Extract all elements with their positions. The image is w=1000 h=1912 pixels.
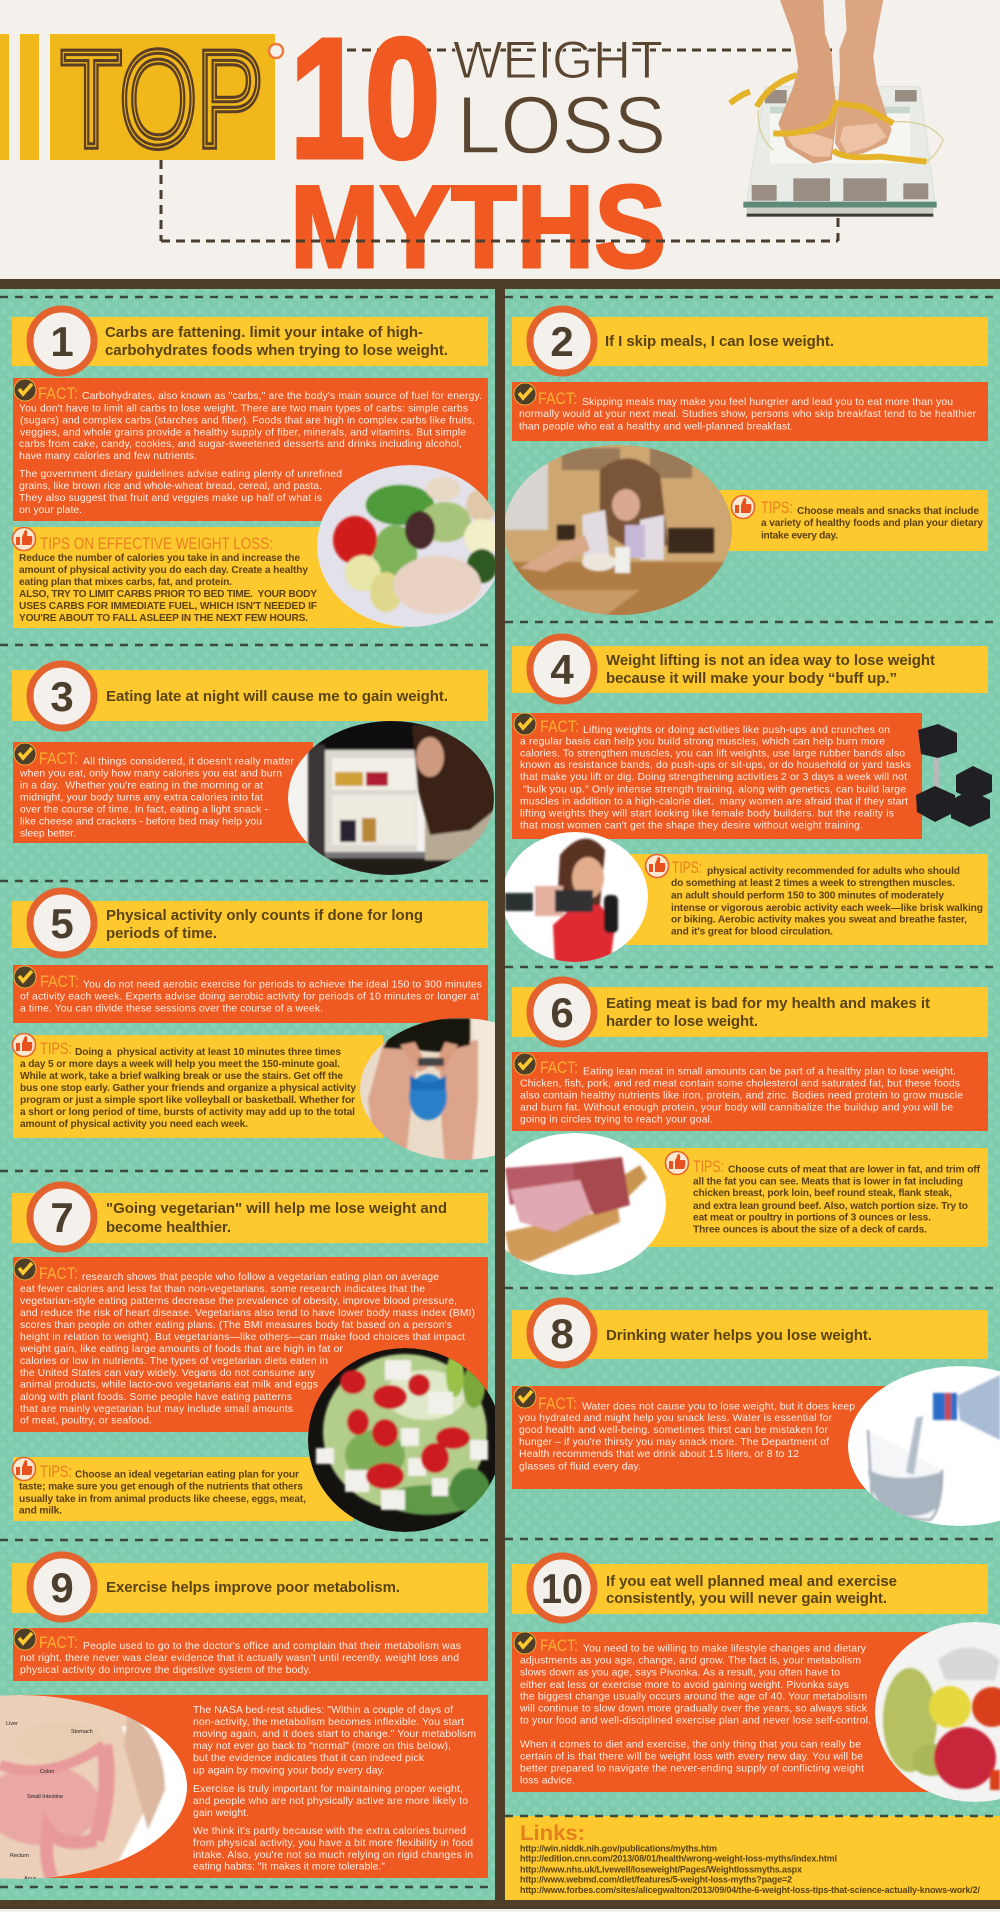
number badge: 9	[50, 1564, 74, 1611]
number badge: 1	[50, 318, 74, 365]
icon: dumbbells	[916, 724, 992, 827]
heading band	[512, 987, 988, 1037]
fact text	[19, 756, 295, 840]
fact text: also contain healthy nutrients like iron, protein, and zinc. Bodies need protein to grow muscle	[520, 1090, 963, 1102]
heading text	[606, 652, 935, 687]
tips text: physical activity recommended for adults who should	[707, 866, 960, 877]
tips text	[693, 1164, 981, 1236]
tips label: TIPS:	[761, 499, 793, 517]
number badge: 10	[541, 1565, 583, 1612]
fact text: "bulk you up." Only intense strength training, along with genetics, can build large	[523, 784, 906, 796]
heading text: because it will make your body “buff up.”	[606, 670, 897, 687]
fact text: veggies, and whole grains provide a healthy supply of fiber, minerals, and vitamins. But simple	[20, 428, 466, 438]
fact text: Carbohydrates, also known as "carbs," are the body's main source of fuel for energy.	[82, 391, 482, 402]
photo: salad plate	[317, 465, 503, 627]
panel: myth 8	[512, 1301, 1000, 1526]
yellow accent bars	[0, 34, 39, 160]
fact text: the United States can vary widely. Vegans do not consume any	[20, 1368, 316, 1379]
heading band	[12, 670, 488, 721]
fact text: on your plate.	[19, 505, 82, 516]
fact text: a regular basis can help you build strong muscles, which can help burn more	[520, 736, 885, 748]
heading text: become healthier.	[106, 1219, 231, 1236]
fact text: that most women can't get the shape they desire without weight training.	[520, 820, 863, 832]
WEIGHT: WEIGHT	[453, 31, 663, 90]
fact text: and burn fat. Without enough protein, your body will cannibalize the buildup and you will be	[520, 1102, 953, 1114]
panel: myth 4	[502, 637, 992, 965]
fact text: scores than people on other eating plans. (The BMI measures body fat based on a person's	[20, 1320, 452, 1331]
tips text: an adult should perform 150 to 300 minutes of moderately	[671, 890, 944, 902]
fact box	[13, 378, 488, 521]
tips label: TIPS:	[672, 859, 702, 877]
fact text: not right. there never was clear evidence that it actually wasn't until recently. weight loss and	[20, 1653, 459, 1664]
fact icon	[14, 966, 36, 988]
fact icon	[14, 743, 36, 765]
tips box	[700, 490, 988, 551]
heading text: harder to lose weight.	[606, 1013, 758, 1030]
dashed line over MYTHS	[161, 240, 838, 242]
fact text	[520, 1066, 963, 1126]
fact text: certain of is that there will be weight loss with every new day. You will be	[520, 1752, 863, 1762]
tips icon	[646, 854, 668, 878]
links list: http://edition.cnn.com/2013/08/01/health/wrong-weight-loss-myths/index.html	[520, 1854, 837, 1864]
photo: anatomy of the digestive system: Liver	[6, 1721, 18, 1727]
heading text: periods of time.	[106, 925, 217, 942]
fact text: will continue to slow down more gradually over the years, so always stick	[519, 1704, 868, 1714]
fact text	[19, 391, 482, 516]
fact text: slows down as you age, says Pivonka. As a result, you often have to	[520, 1668, 840, 1678]
fact text: loss advice.	[520, 1776, 575, 1786]
fact text: either eat less or exercise more to avoid gaining weight. Pivonka says	[520, 1680, 849, 1691]
photo: anatomy of the digestive system: Anus	[24, 1876, 37, 1882]
body text: may not ever go back to "normal" (more on this below),	[193, 1741, 451, 1752]
heading text	[105, 324, 448, 359]
fact text: calories or low in nutrients. The types of vegetarian diets eaten in	[20, 1356, 328, 1367]
fact text: People used to go to the doctor's office and complain that their metabolism was	[83, 1641, 461, 1652]
fact text: like cheese and crackers - before bed may help you	[20, 816, 262, 828]
links list	[520, 1843, 980, 1895]
fact text: Lifting weights or doing activities like push-ups and crunches on	[583, 725, 890, 736]
links list: http://win.niddk.nih.gov/publications/myths.htm	[520, 1843, 717, 1853]
fact label: FACT:	[540, 1637, 578, 1655]
fact text: carbs from cake, candy, cookies, and sugar-sweetened desserts and drinks including alcohol,	[19, 439, 462, 450]
fact text: along with plant foods. Some people have eating patterns	[20, 1392, 292, 1403]
fact icon	[514, 713, 536, 735]
heading text: Weight lifting is not an idea way to lose weight	[606, 652, 935, 669]
number badge	[30, 1555, 94, 1619]
body text: from physical activity, you have a bit more flexibility in food	[193, 1838, 473, 1849]
tips text: eat meat or poultry in portions of 3 ounces or less.	[693, 1212, 931, 1224]
tips text: Choose an ideal vegetarian eating plan for your	[75, 1470, 299, 1480]
tips text	[20, 1047, 356, 1130]
fact text: They also suggest that fruit and veggies make up half of what is	[19, 493, 322, 504]
tips text: usually take in from animal products like cheese, eggs, meat,	[19, 1494, 306, 1505]
photo: anatomy of the digestive system: Colon	[40, 1769, 54, 1775]
fact text	[519, 1644, 871, 1786]
fact text: You do not need aerobic exercise for periods to achieve the ideal 150 to 300 minutes	[83, 980, 482, 990]
tips text: YOU'RE ABOUT TO FALL ASLEEP IN THE NEXT FEW HOURS.	[19, 613, 308, 624]
fact label: FACT:	[538, 1395, 577, 1413]
links list: http://www.forbes.com/sites/alicegwalton/2013/09/04/the-6-weight-loss-tips-that-science-actually-knows-work/2/	[520, 1885, 980, 1895]
fact text: (sugars) and complex carbs (starches and fiber). Foods that are high in complex carbs like fruits,	[20, 416, 475, 426]
heading text: Exercise helps improve poor metabolism.	[106, 1579, 400, 1596]
number badge	[30, 664, 94, 728]
heading text	[106, 907, 423, 942]
heading band	[12, 317, 488, 366]
heading band	[12, 1193, 488, 1243]
heading band	[512, 1564, 988, 1614]
tips text: a short or long period of time, bursts of activity may add up to the total	[20, 1107, 355, 1118]
tips icon	[12, 1034, 36, 1056]
body text: intake. Also, you're not so much relying on rigid changes in	[193, 1850, 473, 1861]
fact text: The government dietary guidelines advise eating plenty of unrefined	[19, 469, 342, 480]
fact text: sleep better.	[20, 828, 76, 840]
TOP badge: TOP	[61, 23, 263, 175]
fact icon	[514, 383, 536, 405]
body text: eating habits; "It makes it more tolerable."	[193, 1862, 385, 1872]
heading text: Eating late at night will cause me to gain weight.	[106, 688, 448, 705]
fact text: over the course of time. In fact, eating a light snack -	[20, 804, 268, 816]
tips text: chicken breast, pork loin, beef round steak, flank steak,	[693, 1188, 952, 1199]
fact text: good health and well-being. sometimes thirst can be mistaken for	[519, 1425, 829, 1436]
fact text: Health recommends that we drink about 1.5 liters, or 8 to 12	[519, 1449, 799, 1460]
heading text: Drinking water helps you lose weight.	[606, 1327, 872, 1344]
fact text: Eating lean meat in small amounts can be part of a healthy plan to lose weight.	[583, 1066, 956, 1078]
fact box	[13, 965, 488, 1023]
number badge: 4	[550, 646, 574, 693]
fact text: of activity each week. Experts advise doing aerobic activity for periods of 10 minutes or longer at	[20, 992, 479, 1002]
body text: but the evidence indicates that it can indeed pick	[193, 1753, 425, 1764]
fact icon	[514, 1632, 536, 1654]
body text: moving again, and it does start to change." Your metabolism	[193, 1729, 476, 1740]
number badge	[530, 980, 594, 1044]
fact text: eat fewer calories and less fat than non-vegetarians. some research indicates that the	[20, 1284, 425, 1295]
body text	[193, 1705, 476, 1872]
links list: http://www.nhs.uk/Livewell/loseweight/Pages/Weightlossmyths.aspx	[520, 1864, 802, 1874]
number badge: 2	[550, 318, 574, 365]
fact label: FACT:	[540, 718, 579, 736]
fact label: FACT:	[40, 973, 79, 991]
fact label: FACT:	[538, 390, 577, 408]
tips text: taste; make sure you get enough of the nutrients that others	[19, 1482, 303, 1492]
photo: woman at open fridge	[288, 715, 495, 878]
fact text	[519, 1402, 855, 1472]
tips text: Choose cuts of meat that are lower in fat, and trim off	[728, 1164, 981, 1176]
tips text: ALSO, TRY TO LIMIT CARBS PRIOR TO BED TIME. YOUR BODY	[19, 589, 317, 600]
fact text: when you eat, only how many calories you eat and burn	[19, 768, 282, 780]
body text: non-activity, the metabolism becomes inflexible. You start	[193, 1717, 464, 1728]
fact text: height in relation to weight). But vegetarians—like others—can make food choices that impact	[20, 1332, 465, 1343]
fact text: You don't have to limit all carbs to lose weight. There are two main types of carbs: simple carbs	[19, 404, 468, 414]
tips text: Doing a physical activity at least 10 minutes three times	[75, 1047, 341, 1058]
fact text: glasses of fluid every day.	[519, 1462, 641, 1472]
panel: myth 6	[484, 980, 988, 1275]
heading band	[12, 1563, 488, 1613]
body text: We think it's partly because with the extra calories burned	[193, 1826, 466, 1837]
fact text: research shows that people who follow a vegetarian eating plan on average	[82, 1272, 439, 1283]
photo: raw meat on board	[505, 1133, 666, 1275]
tips text: eating plan that mixes carbs, fat, and protein.	[19, 577, 232, 588]
fact text: that are mainly vegetarian but may include small amounts	[20, 1404, 293, 1415]
tips text	[761, 506, 983, 542]
fact label: FACT:	[39, 1265, 78, 1283]
fact box	[512, 382, 988, 441]
heading band	[512, 317, 988, 366]
fact text: going in circles trying to reach your goal.	[520, 1114, 713, 1126]
tips box	[625, 854, 988, 945]
panel: links	[505, 1816, 1000, 1900]
tips box	[13, 1035, 383, 1138]
heading text: "Going vegetarian" will help me lose weight and	[106, 1200, 447, 1217]
tips label: TIPS:	[40, 1463, 72, 1481]
number badge: 3	[50, 673, 74, 720]
fact text: Skipping meals may make you feel hungrier and lead you to eat more than you	[582, 397, 953, 408]
heading text	[606, 995, 930, 1030]
fact text: adjustments as you age, change, and grow. The fact is, your metabolism	[520, 1656, 861, 1666]
panel: myth 9	[0, 1555, 488, 1882]
photo: legs with kettlebell	[360, 1018, 495, 1160]
fact text: a time. You can divide these sessions over the course of a week.	[20, 1004, 323, 1014]
body text: The NASA bed-rest studies: "Within a couple of days of	[193, 1705, 453, 1716]
fact text: muscles in addition to a high-calorie diet. many women are afraid that if they start	[520, 796, 908, 808]
body text: up again by moving your body every day.	[193, 1766, 385, 1776]
fact text	[520, 725, 911, 832]
fact text: All things considered, it doesn't really matter	[83, 756, 295, 768]
body text: and people who are not physically active are more likely to	[193, 1796, 468, 1807]
fact text: in a day. Whether you're eating in the morning or at	[20, 780, 263, 792]
fact text	[20, 1641, 461, 1676]
number badge: 6	[550, 989, 574, 1036]
tips box	[630, 1148, 988, 1247]
fact text: calories. To strengthen muscles, you can lift weights, use large rubber bands also	[520, 748, 905, 760]
links heading: Links:	[520, 1822, 585, 1845]
tips box	[13, 527, 403, 628]
fact icon	[514, 1053, 536, 1075]
fact text: hunger – if you're thirsty you may snack more. The Department of	[519, 1437, 829, 1448]
fact label: FACT:	[540, 1059, 578, 1077]
fact text: known as resistance bands, do push-ups or sit-ups, or do household or yard tasks	[520, 760, 911, 771]
number badge	[530, 309, 594, 373]
number 10: 10	[290, 4, 440, 194]
tips text: a day 5 or more days a week will help you meet the 150-minute goal.	[20, 1059, 340, 1070]
fact text: When it comes to diet and exercise, the only thing that you can really be	[520, 1740, 861, 1750]
tips label: TIPS ON EFFECTIVE WEIGHT LOSS:	[40, 535, 273, 553]
TOP badge: TOP	[61, 23, 263, 175]
heading text: consistently, you will never gain weight.	[606, 1590, 887, 1607]
fact text: Water does not cause you to lose weight, but it does keep	[582, 1402, 855, 1412]
fact text: better prepared to navigate the never-ending supply of conflicting weight	[520, 1764, 864, 1774]
tips box	[13, 1457, 353, 1521]
fact text: than people who eat a healthy and well-planned breakfast.	[519, 422, 793, 432]
panel: myth 2	[500, 309, 988, 622]
heading text: Physical activity only counts if done for long	[106, 907, 423, 924]
fact text: you hydrated and might help you snack less. Water is essential for	[519, 1413, 833, 1424]
body text: gain weight.	[193, 1808, 249, 1819]
tips text: Reduce the number of calories you take in and increase the	[19, 553, 300, 564]
photo: anatomy of the digestive system: Stomach	[71, 1729, 93, 1735]
tips icon	[12, 1458, 36, 1480]
number badge	[30, 309, 94, 373]
header: title	[0, 0, 943, 292]
links dashed edge	[505, 1815, 1000, 1817]
heading text	[106, 1200, 447, 1236]
tips text: Three ounces is about the size of a deck of cards.	[693, 1224, 927, 1236]
tips text: and it's great for blood circulation.	[671, 926, 833, 938]
fact text	[20, 980, 482, 1014]
fact box	[512, 1632, 942, 1792]
photo: anatomy of the digestive system: Rectum	[10, 1853, 29, 1859]
panel: myth 10	[512, 1556, 1000, 1802]
number badge	[530, 637, 594, 701]
heading band	[512, 646, 988, 693]
photo: girl at breakfast table	[505, 445, 732, 615]
fact text: and reduce the risk of heart disease. Vegetarians also tend to have lower body mass index (BMI)	[20, 1308, 475, 1319]
fact text	[519, 397, 977, 432]
fact text: normally would at your next meal. Studies show, persons who skip breakfast tend to be healthier	[519, 409, 977, 420]
fact text: that make you lift or dig. Doing strengthening activities 2 or 3 days a week will not	[520, 772, 907, 783]
fact text: of meat, poultry, or seafood.	[20, 1416, 152, 1426]
fact box	[512, 1052, 988, 1131]
fact text: Chicken, fish, pork, and red meat contain some cholesterol and saturated fat, but these foods	[520, 1078, 960, 1090]
links list: http://www.webmd.com/diet/features/5-weight-loss-myths?page=2	[520, 1875, 792, 1885]
tips text: Choose meals and snacks that include	[797, 506, 979, 517]
photo: vegetarian salad bowl	[308, 1348, 502, 1532]
fact text	[19, 1272, 475, 1426]
tips text: or biking. Aerobic activity makes you sweat and breathe faster,	[671, 914, 967, 926]
tips text: intake every day.	[761, 530, 838, 542]
fact text: to your food and well-disciplined exercise plan and never lose self-control.	[520, 1716, 871, 1726]
fact box	[13, 1628, 488, 1681]
tips text: all the fat you can see. Meats that is lower in fat including	[693, 1176, 963, 1188]
tips text: program or just a simple sport like volleyball or basketball. Whether for	[20, 1095, 355, 1106]
photo: woman lifting dumbbell	[502, 832, 648, 965]
number badge	[30, 1185, 94, 1249]
fact text: You need to be willing to make lifestyle changes and dietary	[583, 1644, 867, 1654]
fact text: have many calories and few nutrients.	[19, 451, 197, 462]
tips text	[671, 866, 983, 938]
LOSS: LOSS	[457, 80, 666, 171]
heading text: Eating meat is bad for my health and makes it	[606, 995, 930, 1012]
fact box	[13, 742, 313, 843]
heading band	[12, 901, 488, 948]
fact icon	[514, 1386, 536, 1408]
photo: water poured into a glass	[848, 1366, 1000, 1526]
tips text: and milk.	[19, 1506, 62, 1516]
fact box	[512, 1386, 912, 1489]
number badge: 5	[50, 900, 74, 947]
fact icon	[14, 1258, 36, 1280]
heading text: If you eat well planned meal and exercise	[606, 1573, 897, 1590]
fact icon	[14, 379, 36, 401]
tips text	[19, 553, 317, 624]
tips text: bus one stop early. Gather your friends and organize a physical activity	[20, 1083, 356, 1094]
tips text: amount of physical activity you need each week.	[20, 1119, 248, 1130]
tips text: amount of physical activity you do each day. Create a healthy	[19, 565, 308, 576]
fact label: FACT:	[38, 385, 78, 403]
fact label: FACT:	[39, 750, 78, 768]
heading text	[606, 1573, 897, 1607]
heading text: Carbs are fattening. limit your intake of high-	[105, 324, 423, 341]
teal panel: left column	[0, 289, 495, 1900]
tips text: USES CARBS FOR IMMEDIATE FUEL, WHICH ISN'T NEEDED IF	[19, 601, 317, 612]
panel: myth 7	[12, 1185, 502, 1532]
number badge	[530, 1556, 594, 1620]
number badge	[530, 1301, 594, 1365]
photo: anatomy of the digestive system	[0, 1695, 190, 1882]
lower orange box	[13, 1695, 488, 1878]
photo: fruit on a scale plate	[875, 1622, 1000, 1802]
tips text: do something at least 2 times a week to strengthen muscles.	[671, 878, 955, 889]
photo: anatomy of the digestive system: Small Intestine	[27, 1794, 63, 1800]
links background	[505, 1816, 1000, 1900]
tips icon	[732, 496, 754, 518]
fact text: the biggest change usually occurs around the age of 40. Your metabolism	[520, 1692, 867, 1702]
tips text: While at work, take a brief walking break or use the stairs. Get off the	[20, 1071, 343, 1082]
teal panel: right column	[505, 289, 1000, 1900]
tips text: and extra lean ground beef. Also, watch portion size. Try to	[693, 1201, 968, 1212]
tips label: TIPS:	[693, 1158, 724, 1176]
fact label: FACT:	[39, 1634, 78, 1652]
panel: myth 3	[12, 664, 495, 878]
panel: myth 1	[12, 309, 503, 628]
fact text: vegetarian-style eating patterns decrease the prevalence of obesity, improve blood pressure,	[20, 1296, 457, 1307]
fact text: animal products, while lacto-ovo vegetarians eat milk and eggs	[20, 1380, 318, 1390]
fact icon	[14, 1628, 36, 1650]
tips text	[19, 1470, 306, 1516]
fact text: grains, like brown rice and whole-wheat bread, cereal, and pasta.	[19, 481, 322, 492]
tips icon	[666, 1152, 688, 1174]
heading band	[512, 1310, 988, 1359]
fact text: lifting weights they will start looking like female body builders. but the reality is	[520, 808, 894, 820]
fact text: weight gain, like eating large amounts of foods that are high in fat or	[19, 1344, 344, 1355]
number badge: 8	[550, 1310, 574, 1357]
fact box	[13, 1257, 488, 1432]
tips text: intense or vigorous aerobic activity each week—like brisk walking	[671, 903, 983, 914]
fact text: midnight, your body turns any extra calories into fat	[20, 792, 263, 804]
photo: feet on a glass scale	[730, 0, 943, 217]
number badge	[30, 891, 94, 955]
MYTHS: MYTHS	[290, 161, 666, 292]
heading text: carbohydrates foods when trying to lose weight.	[105, 342, 448, 359]
fact text: physical activity do improve the digestive system of the body.	[20, 1665, 311, 1676]
tips text: a variety of healthy foods and plan your dietary	[761, 518, 983, 529]
heading text: If I skip meals, I can lose weight.	[605, 333, 834, 350]
body text: Exercise is truly important for maintaining proper weight,	[193, 1784, 463, 1795]
dashed connector lines behind the title	[161, 50, 838, 241]
tips label: TIPS:	[40, 1040, 72, 1058]
number badge: 7	[50, 1194, 74, 1241]
tips icon	[12, 528, 36, 550]
panel: myth 5	[12, 888, 495, 1160]
fact box	[512, 713, 922, 839]
